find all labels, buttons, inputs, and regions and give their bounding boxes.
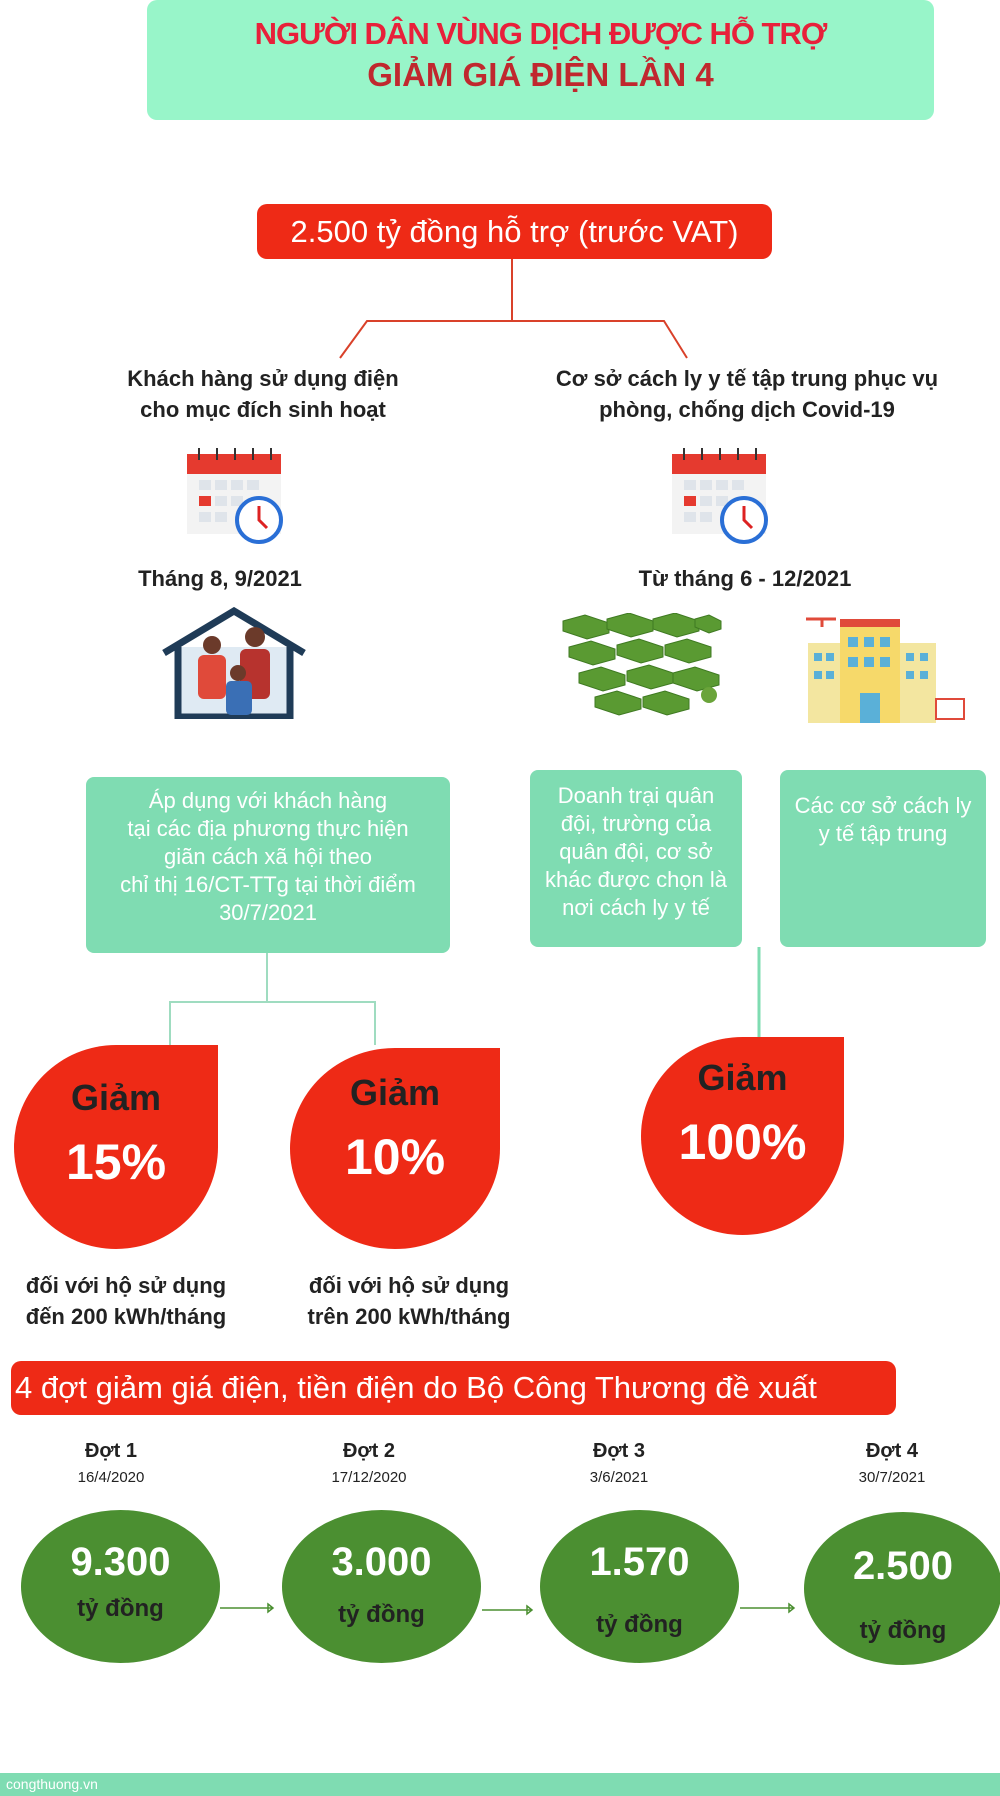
text: 10% condition: đối với hộ sử dụng xyxy=(309,1273,509,1298)
panel: quarantine facilities: Các cơ sở cách ly xyxy=(795,793,971,818)
circle: 3.000: tỷ đồng xyxy=(338,1601,425,1628)
circle: 100%: Giảm xyxy=(697,1057,788,1098)
circle: 100% xyxy=(641,1037,844,1235)
circle: 2.500: tỷ đồng xyxy=(860,1617,946,1644)
text: household customers xyxy=(127,366,399,422)
circle: 100%: 100% xyxy=(679,1114,806,1170)
panel: military camps: quân đội, cơ sở xyxy=(559,839,713,864)
text: household customers: cho mục đích sinh hoạt xyxy=(140,397,386,422)
label: round 3 xyxy=(590,1440,648,1486)
label: round 4: Đợt 4 xyxy=(866,1440,918,1462)
text: 10% condition: trên 200 kWh/tháng xyxy=(308,1304,510,1329)
title: GIẢM GIÁ ĐIỆN LẦN 4 xyxy=(367,56,714,93)
icon: army tents xyxy=(562,613,722,716)
label: round 2: 17/12/2020 xyxy=(331,1469,407,1486)
icon: calendar left xyxy=(187,448,283,544)
text: 15% condition: đến 200 kWh/tháng xyxy=(26,1304,226,1329)
panel: military camps: nơi cách ly y tế xyxy=(562,895,710,920)
panel: quarantine facilities xyxy=(780,770,986,947)
circle: 15%: 15% xyxy=(66,1134,166,1190)
text: date left: Tháng 8, 9/2021 xyxy=(138,566,302,591)
label: round 3: 3/6/2021 xyxy=(590,1469,648,1486)
circle: 9.300 xyxy=(21,1510,220,1663)
heading: total support xyxy=(257,204,772,259)
circle: 2.500 xyxy=(804,1512,1000,1665)
text: household customers: Khách hàng sử dụng điện xyxy=(127,366,399,391)
circle: 3.000 xyxy=(282,1510,481,1663)
panel: household condition: chỉ thị 16/CT-TTg tại thời điểm xyxy=(120,872,416,897)
label: round 3: Đợt 3 xyxy=(593,1440,645,1462)
title xyxy=(147,0,934,120)
heading: total support: 2.500 tỷ đồng hỗ trợ (trước VAT) xyxy=(291,214,738,249)
circle: 1.570 xyxy=(540,1510,739,1663)
text: 15% condition xyxy=(26,1273,226,1329)
text: medical quarantine: Cơ sở cách ly y tế tập trung phục vụ xyxy=(556,366,938,391)
circle: 9.300: tỷ đồng xyxy=(77,1595,164,1622)
circle: 2.500: 2.500 xyxy=(853,1544,953,1588)
icon: hospital xyxy=(806,618,965,723)
heading: 4 rounds: 4 đợt giảm giá điện, tiền điện do Bộ Công Thương đề xuất xyxy=(15,1370,817,1405)
heading: 4 rounds xyxy=(11,1361,896,1415)
label: round 4 xyxy=(859,1440,925,1486)
panel: household condition: giãn cách xã hội theo xyxy=(164,844,372,869)
label: round 1 xyxy=(78,1440,144,1486)
label: round 4: 30/7/2021 xyxy=(859,1469,925,1486)
label: round 2: Đợt 2 xyxy=(343,1440,395,1462)
panel: household condition: 30/7/2021 xyxy=(219,900,317,925)
text: 10% condition xyxy=(308,1273,510,1329)
circle: 15% xyxy=(14,1045,218,1249)
label: round 2 xyxy=(331,1440,407,1486)
text: date right: Từ tháng 6 - 12/2021 xyxy=(639,566,851,591)
icon: family house xyxy=(162,607,306,719)
panel: military camps: khác được chọn là xyxy=(545,867,727,892)
title: NGƯỜI DÂN VÙNG DỊCH ĐƯỢC HỖ TRỢ xyxy=(255,16,826,51)
circle: 15%: Giảm xyxy=(71,1077,161,1118)
panel: military camps: Doanh trại quân xyxy=(558,783,714,808)
text: 15% condition: đối với hộ sử dụng xyxy=(26,1273,226,1298)
panel: household condition xyxy=(86,777,450,953)
label: round 1: Đợt 1 xyxy=(85,1440,137,1462)
text: medical quarantine: phòng, chống dịch Covid-19 xyxy=(599,397,895,422)
footer: congthuong.vn xyxy=(6,1776,98,1792)
circle: 1.570: 1.570 xyxy=(589,1540,690,1584)
circle: 3.000: 3.000 xyxy=(331,1540,432,1584)
text: medical quarantine xyxy=(556,366,938,422)
footer xyxy=(0,1773,1000,1796)
panel: household condition: tại các địa phương thực hiện xyxy=(127,816,409,841)
panel: quarantine facilities: y tế tập trung xyxy=(819,821,947,846)
circle: 1.570: tỷ đồng xyxy=(596,1611,683,1638)
icon: calendar right xyxy=(672,448,768,544)
panel: military camps xyxy=(530,770,742,947)
circle: 10% xyxy=(290,1048,500,1249)
label: round 1: 16/4/2020 xyxy=(78,1469,144,1486)
circle: 9.300: 9.300 xyxy=(70,1540,171,1584)
panel: military camps: đội, trường của xyxy=(561,811,711,836)
circle: 10%: 10% xyxy=(345,1129,445,1185)
circle: 10%: Giảm xyxy=(350,1072,440,1113)
panel: household condition: Áp dụng với khách hàng xyxy=(149,788,387,813)
